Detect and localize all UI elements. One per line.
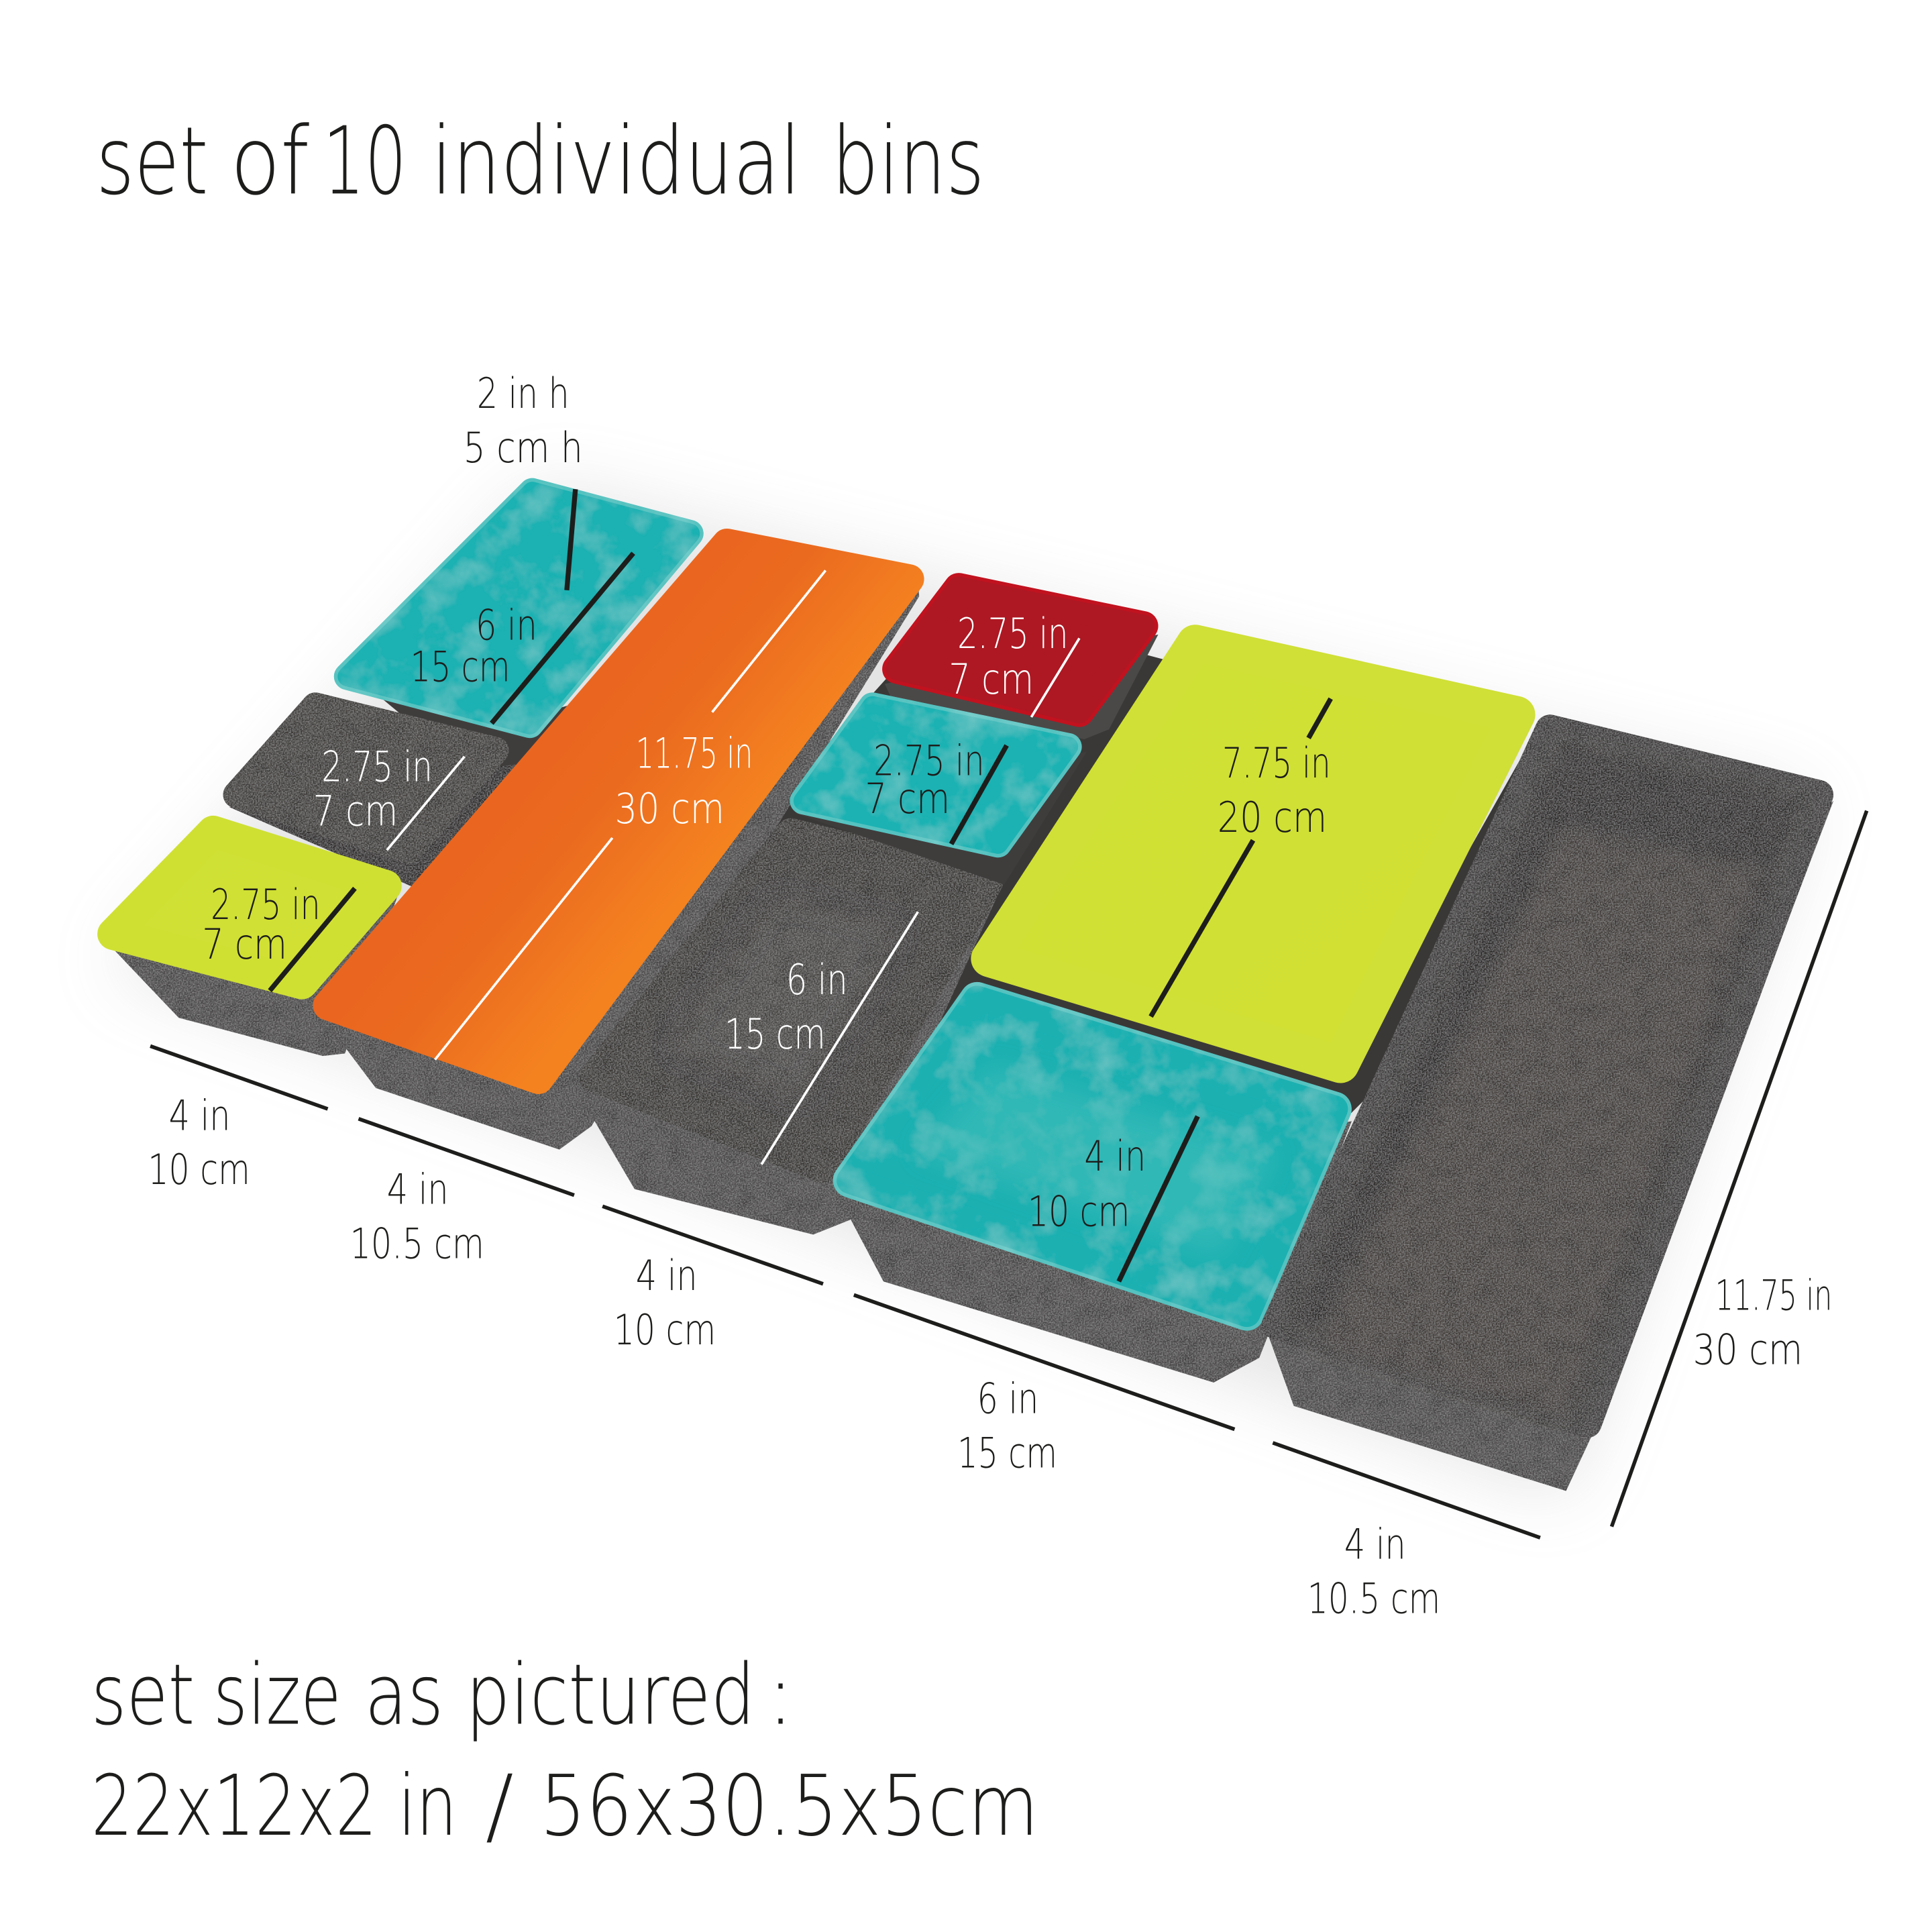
bin: orange 11.75 in: [323, 543, 919, 1150]
label: orange: 30 cm: [615, 784, 724, 833]
label: orange: 11.75 in: [636, 729, 753, 777]
title: individual: [431, 106, 801, 215]
bin: teal 4 in, front: [838, 1000, 1352, 1383]
label: total length: [1693, 1271, 1832, 1374]
label: red: 7 cm: [949, 655, 1034, 704]
dimension line: orange lower: [435, 838, 612, 1060]
label: width 1: 4 in: [169, 1091, 230, 1140]
bin: lime 7.75 in: [973, 643, 1532, 1115]
label: lime large: 7.75 in: [1222, 739, 1331, 788]
set size dimensions: 56x30.5x5cm: [539, 1758, 1038, 1855]
label: red: [949, 609, 1068, 704]
dark gaps between bins: [542, 653, 1509, 1318]
bin: red 2.75 in: [885, 588, 1159, 739]
label: dark grey small: [313, 742, 433, 836]
set size heading: [91, 1647, 795, 1744]
dimension line: lime large lower: [1151, 841, 1253, 1016]
label: width 1: [148, 1091, 250, 1194]
label: width 4: 15 cm: [957, 1429, 1057, 1478]
outer dimension line 3: [602, 1206, 823, 1284]
set size dimensions: 22x12x2: [91, 1758, 377, 1855]
label: width 5: [1307, 1519, 1440, 1623]
set size dimensions: [91, 1758, 1038, 1855]
dimension line: dark grey medium: [761, 912, 918, 1165]
label: width 2: 4 in: [387, 1165, 449, 1214]
set size dimensions: in: [398, 1758, 457, 1855]
label: teal large: 4 in: [1084, 1132, 1146, 1181]
label: lime small: [202, 880, 321, 969]
label: dark grey medium: 15 cm: [724, 1010, 826, 1059]
set size heading: set: [91, 1647, 195, 1744]
dimension line: orange upper: [712, 570, 826, 712]
label: teal small: 7 cm: [865, 774, 950, 823]
bin: teal 6 in, back left: [347, 492, 690, 801]
label: width 4: 6 in: [977, 1375, 1038, 1424]
label: width 3: 4 in: [636, 1251, 698, 1300]
bin: dark grey 2.75 in: [229, 706, 517, 890]
label: total length: 30 cm: [1693, 1325, 1803, 1374]
label: width 3: 10 cm: [614, 1305, 716, 1354]
title: 10: [323, 106, 407, 215]
label: dark grey small: 7 cm: [313, 787, 398, 836]
label: teal large: [1028, 1132, 1146, 1236]
bin: lime 2.75 in: [107, 832, 400, 1056]
soft shadow under the set: [111, 487, 1811, 1497]
outer dimension line right: [1611, 811, 1867, 1527]
label: dark grey small: 2.75 in: [321, 742, 433, 791]
label: dark grey medium: [724, 955, 848, 1059]
label: height: 2 in h: [477, 369, 570, 418]
set size heading: as: [365, 1647, 443, 1744]
dimension line: dark grey small: [387, 757, 464, 850]
label: lime large: [1218, 739, 1331, 842]
label: height: 5 cm h: [464, 423, 583, 472]
label: width 1: 10 cm: [148, 1145, 250, 1194]
title: [96, 106, 985, 215]
dimension line: red: [1031, 638, 1079, 717]
set size heading: :: [766, 1647, 795, 1744]
label: red: 2.75 in: [957, 609, 1068, 658]
label: lime small: 2.75 in: [211, 880, 321, 929]
label: teal large: 10 cm: [1028, 1187, 1130, 1236]
bin: dark grey 6 in: [577, 833, 1004, 1234]
dimension line: height: [567, 489, 576, 590]
set size dimensions: /: [486, 1758, 514, 1855]
dimension line: teal small: [951, 745, 1007, 844]
label: width 5: 4 in: [1344, 1519, 1406, 1568]
label: lime large: 20 cm: [1218, 793, 1327, 842]
label: dark grey medium: 6 in: [786, 955, 848, 1004]
dimension line: teal large: [1119, 1116, 1197, 1281]
bin: dark grey 11.75 in, right: [1267, 729, 1833, 1491]
label: orange: [615, 729, 753, 833]
title: of: [230, 106, 309, 215]
label: width 2: 10.5 cm: [350, 1219, 484, 1268]
label: width 4: [957, 1375, 1057, 1478]
label: teal 6 in: [411, 600, 537, 692]
label: teal small: [865, 736, 985, 823]
label: lime small: 7 cm: [202, 920, 287, 969]
outer dimension line 5: [1273, 1443, 1540, 1538]
label: width 2: [350, 1165, 484, 1268]
set size heading: pictured: [466, 1647, 755, 1744]
label: teal 6 in: 15 cm: [411, 643, 510, 692]
dimension line: teal 6 in: [492, 553, 633, 723]
label: width 5: 10.5 cm: [1307, 1574, 1440, 1623]
label: teal small: 2.75 in: [873, 736, 985, 785]
outer dimension line 4: [854, 1295, 1234, 1430]
title: bins: [832, 106, 985, 215]
title: set: [96, 106, 208, 215]
label: width 3: [614, 1251, 716, 1354]
bin: teal 2.75 in: [795, 706, 1087, 885]
set size heading: size: [213, 1647, 341, 1744]
dimension line: lime small: [270, 888, 355, 991]
outer dimension line 2: [358, 1119, 574, 1195]
dimension line: lime large upper: [1309, 698, 1331, 738]
label: teal 6 in: 6 in: [476, 600, 537, 649]
label: total length: 11.75 in: [1715, 1271, 1832, 1320]
label: height: [464, 369, 583, 472]
outer dimension line 1: [150, 1046, 328, 1109]
